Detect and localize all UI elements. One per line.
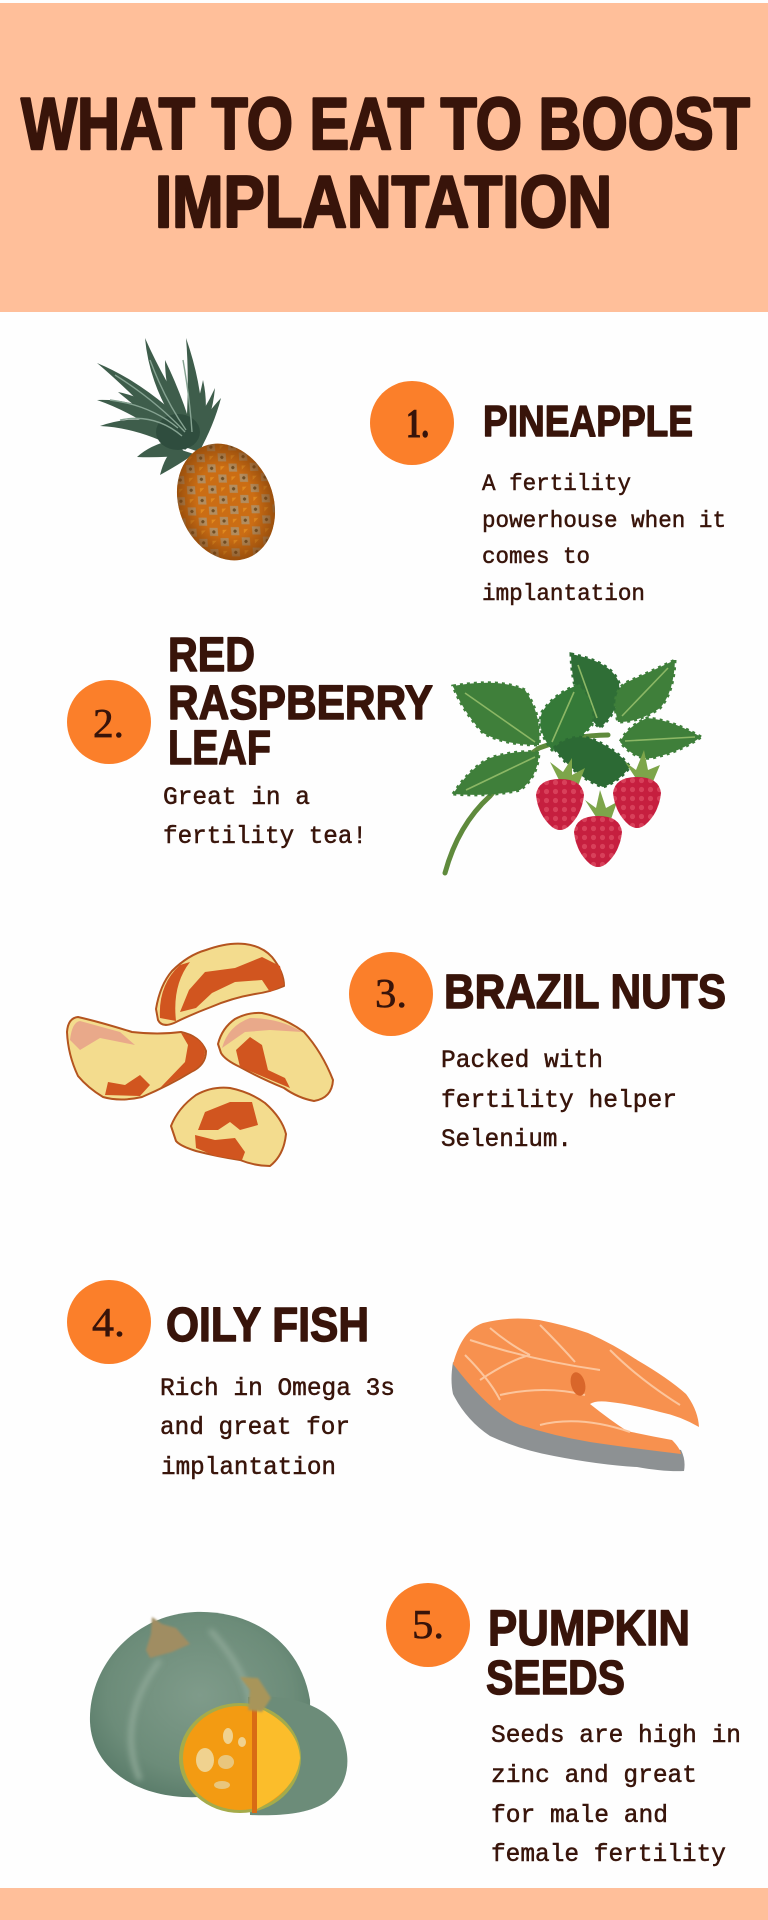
item 4: oily fish xyxy=(67,1280,699,1482)
text: brazil nuts description xyxy=(441,1046,677,1154)
text: pineapple description: comes to xyxy=(482,544,590,571)
text: pumpkin seeds description: for male and xyxy=(491,1801,668,1830)
header band xyxy=(0,3,768,312)
number badge 2 xyxy=(67,680,151,764)
item 1: pineapple xyxy=(97,338,726,608)
text: oily fish description: Rich in Omega 3s xyxy=(160,1374,395,1403)
heading: pineapple: PINEAPPLE xyxy=(483,397,693,446)
text: brazil nuts description: fertility helper xyxy=(441,1086,677,1115)
heading: oily fish: OILY FISH xyxy=(166,1299,369,1352)
text: pineapple description: powerhouse when it xyxy=(482,508,726,535)
text: oily fish description xyxy=(160,1374,395,1482)
number badge 2: 2. xyxy=(93,700,124,746)
heading: pumpkin seeds: SEEDS xyxy=(486,1652,625,1705)
heading: red raspberry leaf xyxy=(168,629,433,775)
number badge 4 xyxy=(67,1280,151,1364)
icon: raspberry branch xyxy=(445,654,701,873)
number badge 4: 4. xyxy=(92,1299,125,1345)
number badge 3 xyxy=(349,952,433,1036)
text: pineapple description xyxy=(482,471,726,608)
text: brazil nuts description: Selenium. xyxy=(441,1125,572,1154)
heading: red raspberry leaf: LEAF xyxy=(168,722,271,775)
text: pineapple description: A fertility xyxy=(482,471,631,498)
title: IMPLANTATION xyxy=(155,162,612,243)
text: pumpkin seeds description xyxy=(491,1721,741,1869)
text: oily fish description: implantation xyxy=(161,1453,336,1482)
heading: pumpkin seeds xyxy=(486,1600,690,1705)
number badge 1 xyxy=(370,381,454,465)
number badge 1: 1. xyxy=(406,400,429,446)
icon: brazil nuts xyxy=(67,944,333,1166)
icon: salmon steak xyxy=(452,1319,699,1471)
number badge 5 xyxy=(386,1583,470,1667)
text: raspberry leaf description: Great in a xyxy=(163,783,310,812)
heading: pumpkin seeds: PUMPKIN xyxy=(488,1600,690,1656)
text: pineapple description: implantation xyxy=(482,581,645,608)
icon: pineapple xyxy=(97,338,292,575)
text: raspberry leaf description: fertility tea! xyxy=(163,822,367,851)
icon: pumpkins xyxy=(90,1612,347,1815)
heading: red raspberry leaf: RED xyxy=(168,629,255,682)
number badge 3: 3. xyxy=(375,970,407,1016)
title xyxy=(21,84,750,243)
item 5: pumpkin seeds xyxy=(90,1583,741,1869)
text: pumpkin seeds description: Seeds are high in xyxy=(491,1721,741,1750)
text: raspberry leaf description xyxy=(163,783,367,851)
text: oily fish description: and great for xyxy=(160,1413,350,1442)
item 3: brazil nuts xyxy=(67,944,726,1166)
heading: red raspberry leaf: RASPBERRY xyxy=(168,677,433,730)
number badge 5: 5. xyxy=(412,1601,444,1647)
footer band xyxy=(0,1888,768,1920)
text: pumpkin seeds description: female fertility xyxy=(491,1840,726,1869)
text: brazil nuts description: Packed with xyxy=(441,1046,603,1075)
item 2: red raspberry leaf xyxy=(67,629,701,873)
heading: brazil nuts: BRAZIL NUTS xyxy=(444,966,726,1019)
text: pumpkin seeds description: zinc and great xyxy=(491,1761,697,1790)
